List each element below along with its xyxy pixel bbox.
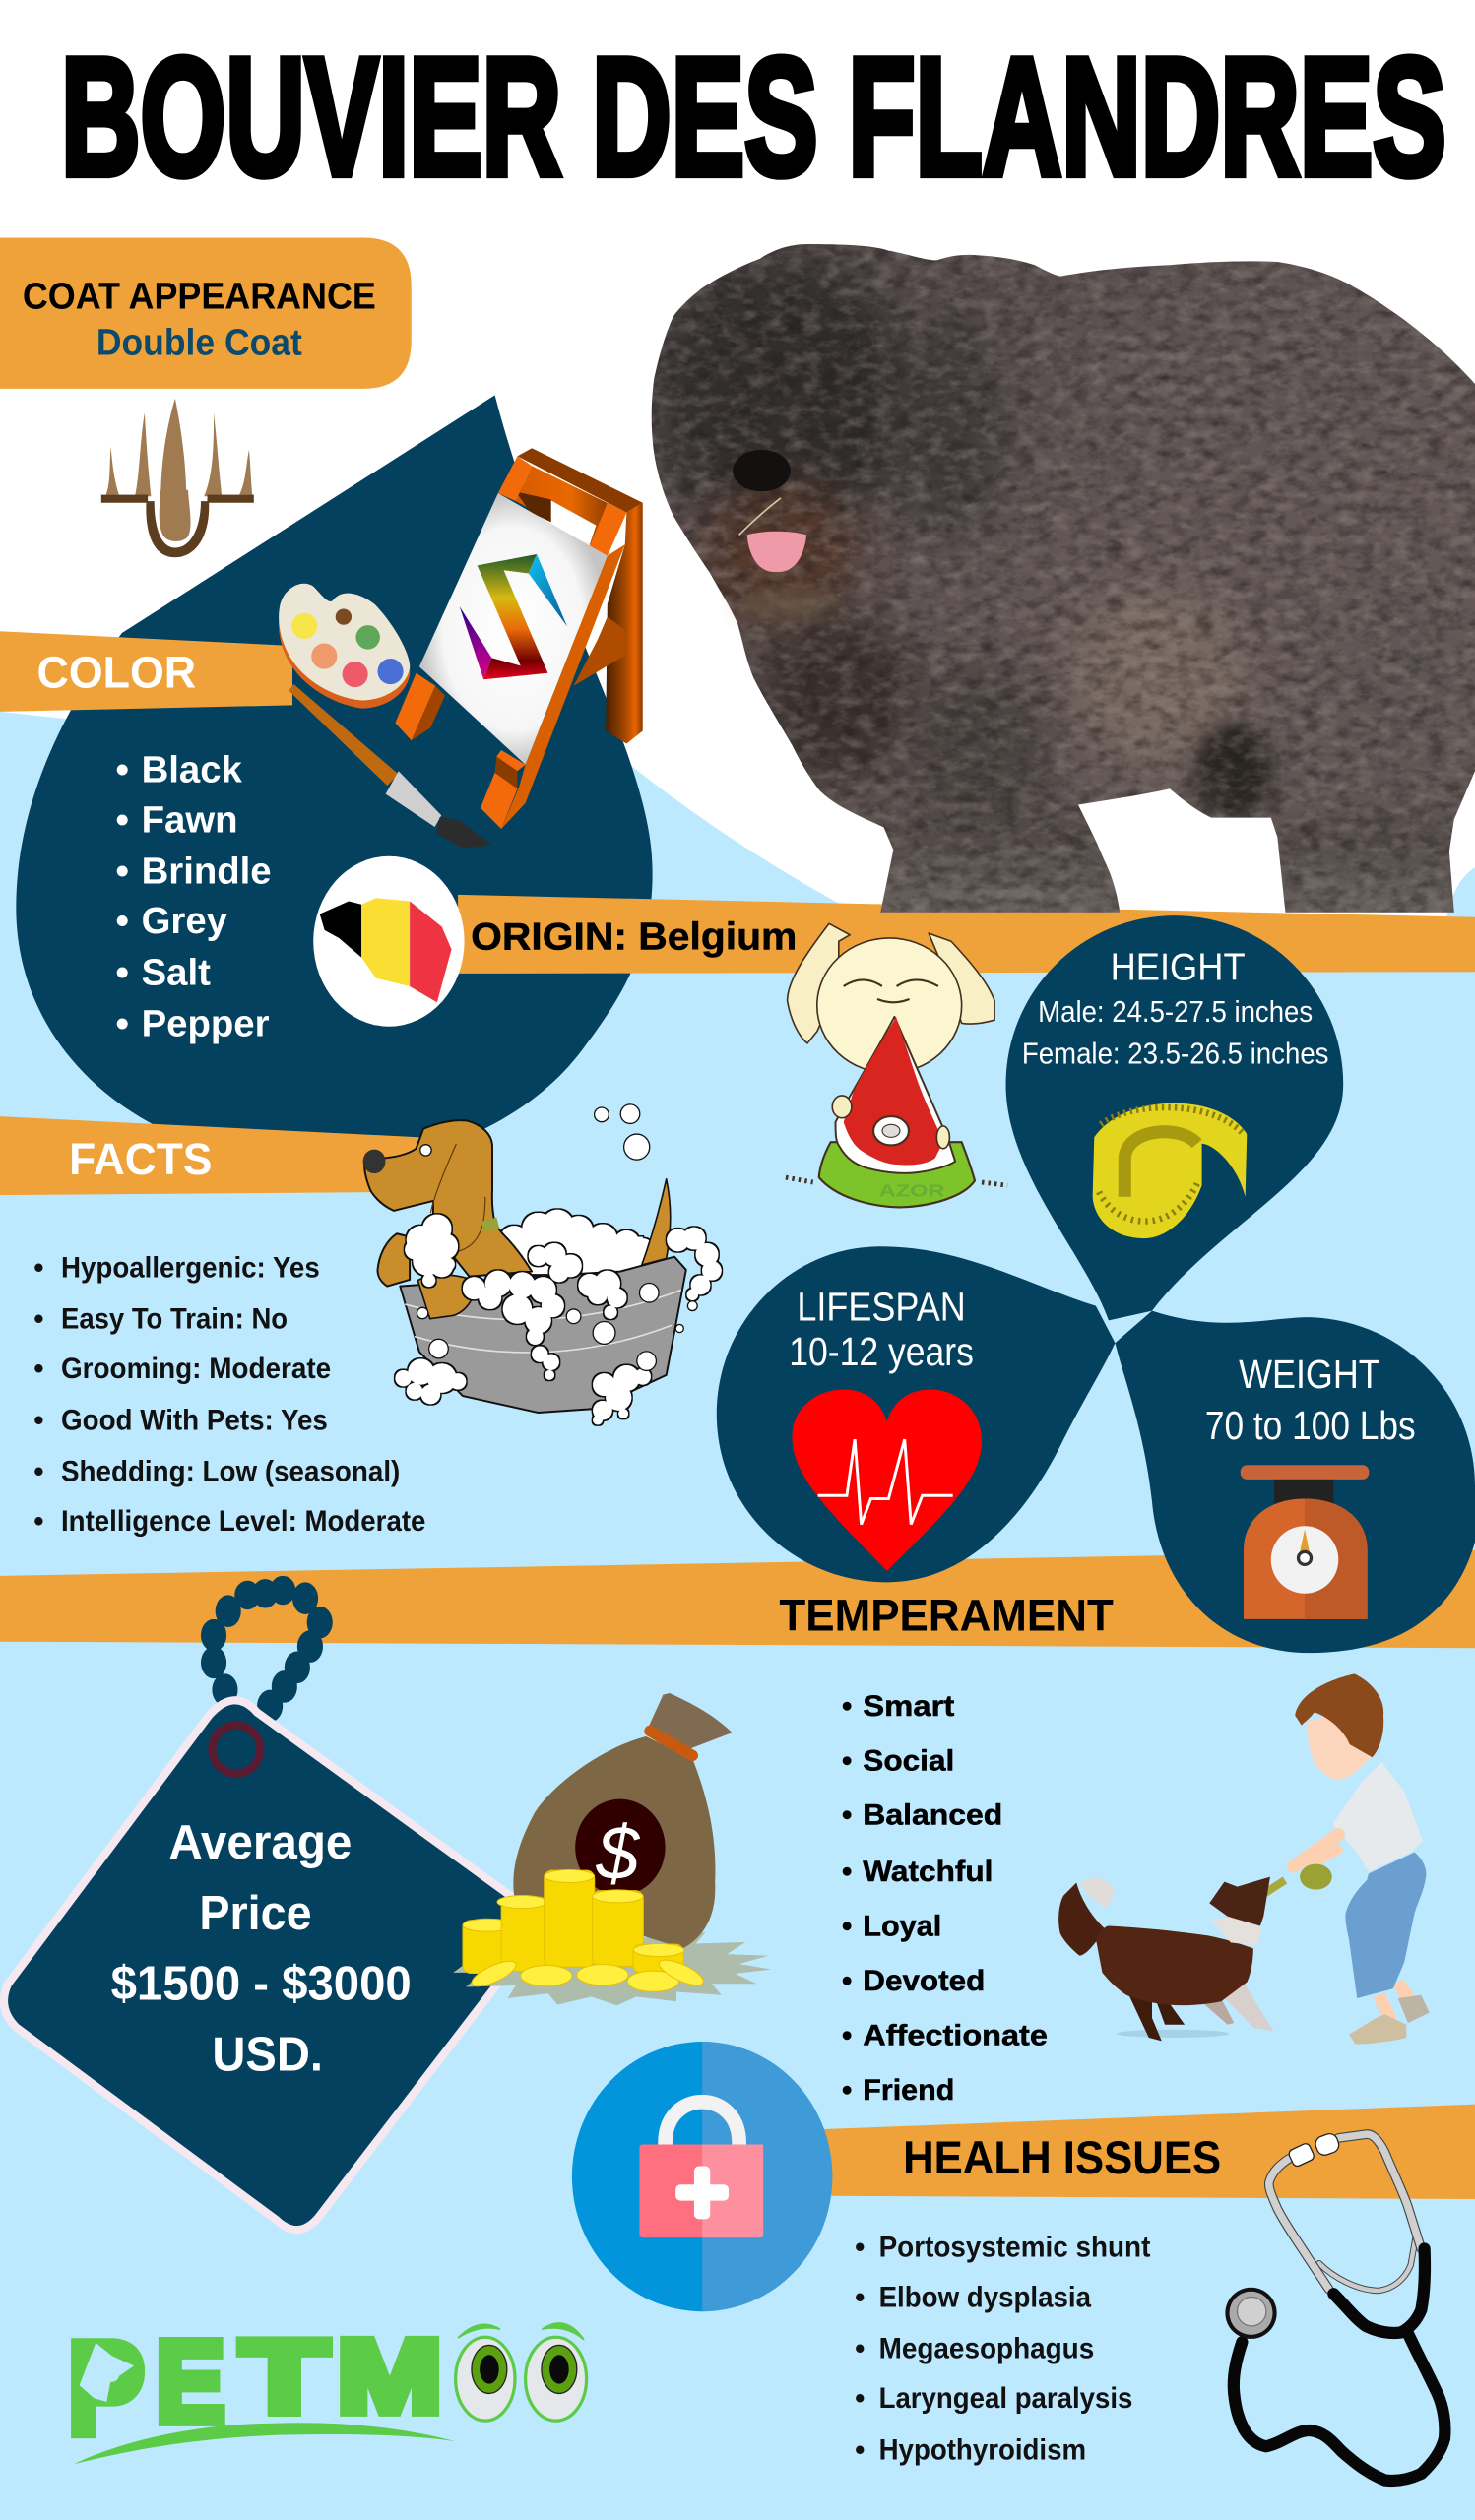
panel: weight drop	[1115, 1311, 1475, 1653]
text: price: Price	[199, 1887, 312, 1940]
icon: tape measure	[1093, 1103, 1247, 1238]
list: colours: Grey	[142, 900, 228, 942]
list: colours: Black	[142, 749, 243, 791]
icon: palette	[279, 584, 410, 709]
banner: origin	[458, 895, 1475, 974]
list: facts	[33, 1251, 425, 1538]
list: colours	[115, 749, 272, 1045]
list: colours: •	[115, 850, 129, 893]
text: usd: USD.	[212, 2028, 323, 2081]
panel: lifespan drop	[717, 1246, 1115, 1582]
banner: health issues	[803, 2105, 1475, 2199]
icon: soap suds	[395, 1215, 722, 1424]
photo: bouvier dog	[643, 238, 1475, 918]
list: facts: Grooming: Moderate	[61, 1353, 331, 1385]
list: temperament: Devoted	[863, 1965, 985, 1997]
list: temperament	[842, 1690, 1048, 2107]
panel: price tag	[4, 1700, 541, 2230]
list: temperament: •	[842, 1799, 852, 1832]
list: health issues: Megaesophagus	[879, 2333, 1094, 2365]
list: temperament: •	[842, 1965, 852, 1997]
text: logo letters: P	[68, 2315, 145, 2462]
text: temperament heading: TEMPERAMENT	[779, 1590, 1114, 1640]
text: lifespan value: 10-12 years	[789, 1329, 974, 1374]
icon: brown dog	[1058, 1877, 1273, 2041]
panel: height drop	[1006, 915, 1343, 1320]
text: logo letters: T	[241, 2319, 328, 2434]
list: temperament: Balanced	[863, 1799, 1002, 1832]
heading: facts: FACTS	[69, 1134, 212, 1184]
icon: dog beard	[739, 588, 836, 620]
text: logo letters	[68, 2315, 442, 2462]
list: temperament: Affectionate	[863, 2019, 1048, 2051]
icon: bubbles	[417, 1104, 697, 1370]
list: health issues: Hypothyroidism	[879, 2433, 1086, 2466]
list: facts: •	[33, 1303, 44, 1336]
list: temperament: •	[842, 2019, 852, 2051]
list: facts: •	[33, 1456, 44, 1488]
list: colours: •	[115, 900, 129, 942]
heading: lifespan: LIFESPAN	[797, 1284, 966, 1329]
list: temperament: •	[842, 1910, 852, 1942]
text: bowl label: AZOR	[879, 1181, 945, 1201]
text: dollar sign: $	[595, 1809, 640, 1896]
icon: hair follicle	[101, 399, 254, 557]
icon: dog tongue	[747, 532, 806, 572]
panel: colour teardrop	[16, 395, 653, 1166]
text: weight value: 70 to 100 Lbs	[1205, 1403, 1416, 1448]
list: facts: Easy To Train: No	[61, 1303, 288, 1336]
icon: easel	[395, 448, 643, 829]
icon: dog nose	[733, 450, 791, 491]
icon: bathing dog	[363, 1104, 722, 1424]
list: facts: •	[33, 1404, 44, 1436]
icon: canvas logo	[460, 554, 567, 679]
icon: dog eating meat	[786, 923, 1007, 1207]
text: double coat: Double Coat	[96, 322, 302, 363]
text: logo letters: E	[156, 2317, 224, 2446]
icon: medical lock circle	[572, 2042, 832, 2311]
list: temperament: Loyal	[863, 1910, 941, 1942]
icon: logo eyes	[456, 2323, 587, 2421]
list: temperament: Smart	[863, 1690, 955, 1723]
list: facts: •	[33, 1353, 44, 1385]
list: facts: Shedding: Low (seasonal)	[61, 1456, 400, 1488]
list: temperament: •	[842, 2074, 852, 2107]
list: colours: Brindle	[142, 850, 272, 893]
list: health issues: •	[855, 2433, 865, 2466]
text: price range: $1500 - $3000	[111, 1958, 412, 2011]
list: temperament: Social	[863, 1744, 954, 1777]
heading: health issues: HEALH ISSUES	[903, 2132, 1221, 2184]
list: colours: •	[115, 798, 129, 841]
icon: tag hole	[212, 1726, 260, 1774]
list: health issues: Laryngeal paralysis	[879, 2382, 1132, 2415]
list: temperament: Friend	[863, 2074, 954, 2107]
icon: bead chain	[201, 1576, 333, 1722]
banner: facts	[0, 1116, 421, 1195]
list: health issues	[855, 2232, 1151, 2466]
heading: color: COLOR	[37, 647, 196, 697]
banner: color	[0, 631, 292, 712]
white top area	[0, 0, 1475, 918]
icon: scale	[1241, 1465, 1369, 1619]
list: facts: Good With Pets: Yes	[61, 1404, 328, 1436]
list: facts: •	[33, 1251, 44, 1284]
list: colours: •	[115, 749, 129, 791]
list: colours: Salt	[142, 951, 211, 993]
text: origin: ORIGIN: Belgium	[471, 915, 797, 958]
list: health issues: •	[855, 2232, 865, 2264]
list: colours: Pepper	[142, 1003, 270, 1045]
list: health issues: •	[855, 2382, 865, 2415]
icon: heart	[792, 1390, 982, 1571]
list: facts: Intelligence Level: Moderate	[61, 1505, 425, 1538]
list: facts: •	[33, 1505, 44, 1538]
heading: height: HEIGHT	[1111, 946, 1246, 988]
icon: paint brush	[289, 684, 492, 849]
heading: coat appearance: COAT APPEARANCE	[23, 275, 376, 316]
banner: temperament	[0, 1550, 1475, 1648]
list: colours: •	[115, 951, 129, 993]
list: temperament: •	[842, 1744, 852, 1777]
text: logo letters: M	[338, 2319, 442, 2434]
panel: coat appearance	[0, 238, 412, 389]
heading: weight: WEIGHT	[1239, 1352, 1380, 1397]
list: colours: •	[115, 1003, 129, 1045]
text: male height: Male: 24.5-27.5 inches	[1038, 996, 1313, 1029]
logo: petmoo	[68, 2315, 587, 2464]
icon: coins	[463, 1869, 707, 1991]
text: average: Average	[168, 1816, 352, 1869]
list: health issues: Portosystemic shunt	[879, 2232, 1151, 2264]
icon: stethoscope	[1225, 2131, 1444, 2481]
icon: money bag	[453, 1693, 771, 2005]
list: temperament: •	[842, 1856, 852, 1888]
list: temperament: Watchful	[863, 1856, 993, 1888]
list: temperament: •	[842, 1690, 852, 1723]
text: female height: Female: 23.5-26.5 inches	[1022, 1038, 1329, 1070]
list: health issues: •	[855, 2333, 865, 2365]
list: facts: Hypoallergenic: Yes	[61, 1251, 320, 1284]
icon: boy playing with dog	[1058, 1673, 1430, 2045]
list: health issues: •	[855, 2281, 865, 2313]
list: colours: Fawn	[142, 798, 238, 841]
icon: belgium map	[313, 856, 465, 1027]
list: health issues: Elbow dysplasia	[879, 2281, 1092, 2313]
